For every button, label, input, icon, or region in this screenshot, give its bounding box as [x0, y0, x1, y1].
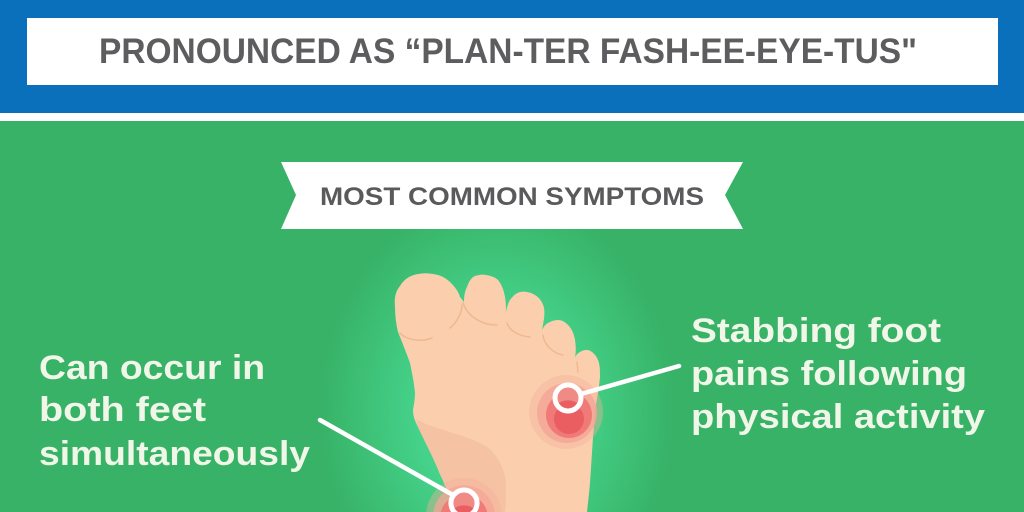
text: stabbing foot pains: Stabbing foot — [691, 312, 941, 350]
text: stabbing foot pains — [691, 312, 985, 436]
foot shape — [395, 273, 600, 512]
green panel — [0, 121, 1024, 512]
pronunciation box — [27, 18, 998, 85]
text: stabbing foot pains: physical activity — [691, 398, 985, 436]
text: both feet: Can occur in — [39, 349, 265, 387]
callout line: stabbing pains — [555, 366, 679, 411]
pain spot: arch — [426, 478, 502, 512]
ribbon banner — [281, 162, 743, 229]
header band — [0, 0, 1024, 121]
text: both feet — [39, 349, 310, 473]
pain spot: stabbing — [529, 375, 603, 449]
pronunciation heading: PRONOUNCED AS “PLAN-TER FASH-EE-EYE-TUS" — [99, 32, 917, 71]
text: both feet: both feet — [39, 391, 206, 429]
text: stabbing foot pains: pains following — [691, 355, 967, 393]
foot glow — [319, 192, 675, 512]
callout line: both feet — [320, 420, 477, 512]
banner heading: MOST COMMON SYMPTOMS — [320, 183, 704, 211]
toe creases — [400, 303, 578, 372]
text: both feet: simultaneously — [39, 435, 310, 473]
illustration: foot — [395, 273, 603, 512]
arch shadow — [416, 419, 506, 512]
